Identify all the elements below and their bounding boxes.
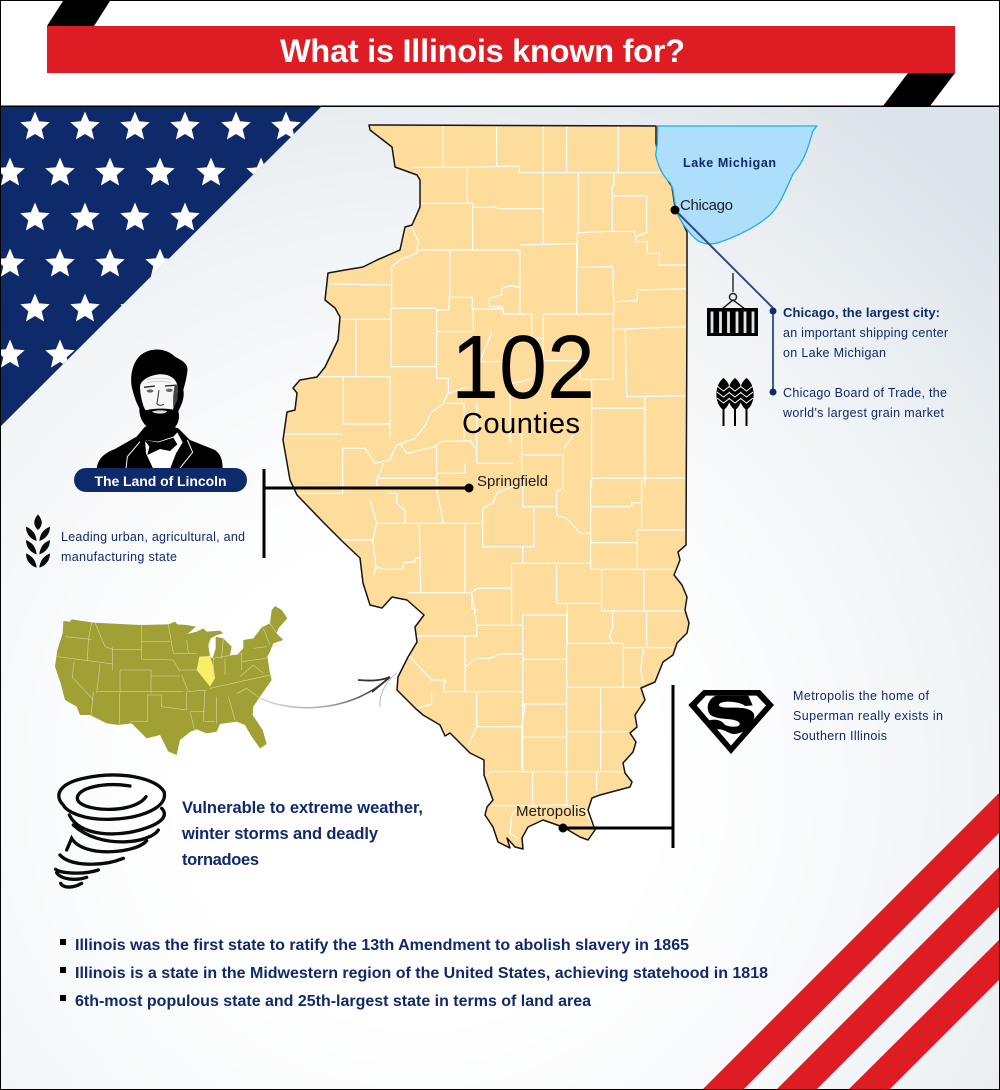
icon: wheat bundle [716, 378, 754, 426]
label pill: The Land of Lincoln: The Land of Lincoln [94, 473, 226, 489]
bullet list: Illinois is a state in the Midwestern region of the United States, achieving statehood in 1818 [75, 965, 768, 982]
text: leading state [61, 530, 245, 564]
bullet list: Illinois was the first state to ratify the 13th Amendment to abolish slavery in 1865 [75, 937, 689, 954]
callout: Springfield [264, 469, 548, 558]
text: Superman: Metropolis the home of [793, 689, 930, 703]
icon: Superman shield [688, 690, 774, 754]
text: Superman [793, 689, 943, 743]
red diagonal stripes [703, 793, 999, 1089]
lake label: Lake Michigan [683, 156, 776, 170]
title banner [47, 26, 955, 73]
icon: wheat stalk [26, 514, 50, 568]
callout: Metropolis [516, 685, 673, 848]
header band [0, 0, 1000, 107]
Illinois county map [283, 125, 689, 849]
text: weather: Vulnerable to extreme weather, [182, 799, 423, 817]
text: leading state: manufacturing state [61, 550, 177, 564]
callout: Chicago: an important shipping center [783, 326, 948, 340]
icon: shipping container [707, 273, 758, 336]
black accent stripe right [883, 73, 955, 106]
county count: 102 [451, 318, 595, 418]
arrow: US map to Illinois [260, 673, 397, 708]
callout: Springfield: Springfield [477, 473, 548, 490]
counties label: Counties [462, 408, 580, 440]
title: What is Illinois known for? [280, 33, 685, 69]
callout: Chicago: Chicago [680, 197, 733, 214]
Chicago text: Chicago, the largest city: [783, 305, 940, 320]
callout: Chicago [670, 197, 948, 420]
text: Superman: Southern Illinois [793, 729, 887, 743]
callout: Chicago: world's largest grain market [782, 406, 945, 420]
flag corner with stars [0, 107, 321, 427]
Lake Michigan [656, 126, 817, 244]
Board of Trade text: Chicago Board of Trade, the [783, 386, 947, 400]
portrait: Abraham Lincoln [97, 349, 223, 469]
black accent stripe left [47, 1, 110, 26]
label pill: The Land of Lincoln [74, 468, 247, 492]
icon: tornado [56, 775, 164, 887]
text: weather [181, 799, 423, 869]
callout: Metropolis: Metropolis [516, 803, 586, 820]
US map with Illinois highlighted [55, 606, 287, 755]
bullet list [60, 937, 768, 1010]
text: Superman: Superman really exists in [793, 709, 943, 723]
text: leading state: Leading urban, agricultural, and [61, 530, 245, 544]
callout: Chicago: on Lake Michigan [783, 346, 886, 360]
text: weather: tornadoes [182, 851, 259, 869]
text: weather: winter storms and deadly [181, 825, 379, 843]
bullet list: 6th-most populous state and 25th-largest state in terms of land area [75, 993, 591, 1010]
